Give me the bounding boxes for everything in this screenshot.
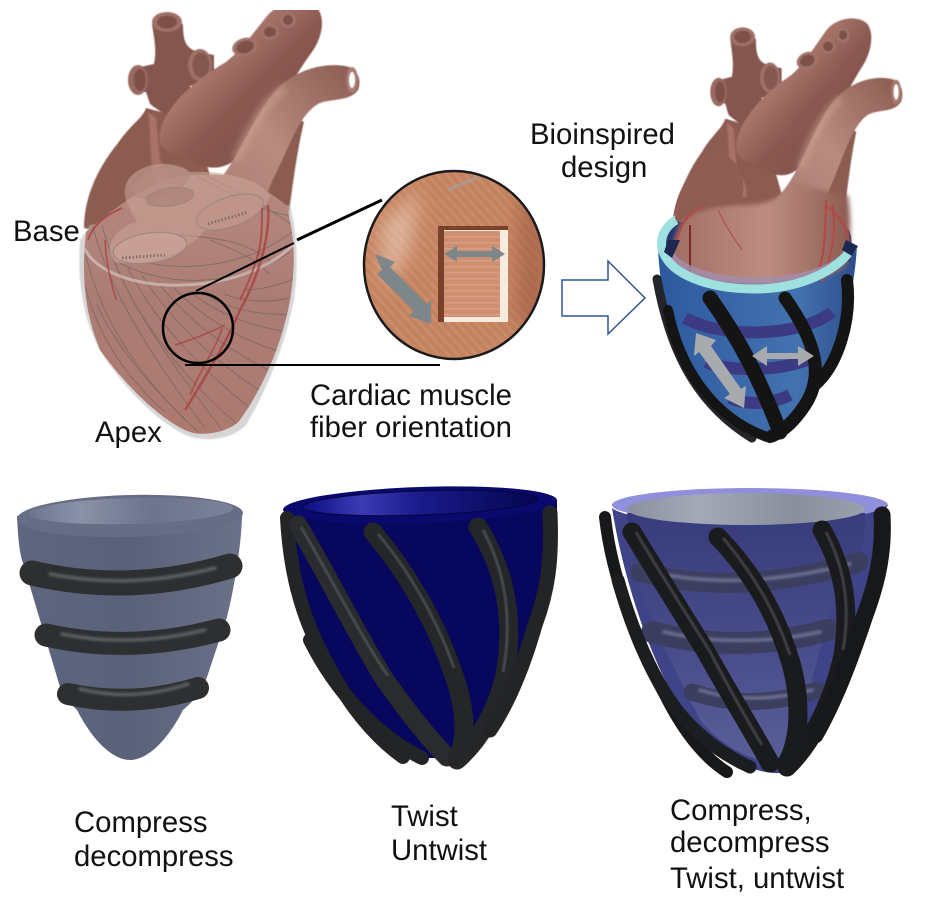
valve plane (110, 159, 270, 268)
cup opening (302, 487, 538, 519)
label: twist untwist: Twist (391, 800, 458, 833)
heart upper vessels (674, 18, 902, 254)
rim dark ends (664, 240, 858, 258)
black twist tubes (657, 279, 848, 438)
coronary arteries (676, 200, 848, 282)
label: twist untwist: Untwist (391, 834, 487, 867)
panel: compress actuator (16, 492, 244, 760)
muscle tissue texture (364, 171, 544, 359)
arrow: outline to design (562, 261, 645, 334)
band 1 (32, 566, 230, 583)
twist tubes (287, 513, 550, 760)
tube highlights (636, 532, 846, 745)
zoom connector lines (185, 200, 440, 365)
small grey mark (448, 177, 478, 190)
label: combined motion: Compress, (670, 794, 812, 827)
heart upper vessels (83, 10, 360, 230)
coronary arteries (88, 205, 268, 410)
arrow: diagonal sleeve direction (694, 333, 746, 408)
ventricle with fibers (80, 172, 296, 434)
cyan rim (662, 220, 853, 289)
label: combined motion: Twist, untwist (670, 862, 844, 895)
arrow: diagonal fiber direction (375, 254, 431, 324)
muscle fiber lines (80, 172, 296, 432)
sleeve body (658, 246, 857, 432)
pale band line (84, 245, 293, 285)
tissue dark side (510, 200, 543, 328)
zoom circle on heart (163, 293, 233, 363)
lavender rim (612, 488, 888, 522)
label: combined motion: decompress (670, 826, 830, 859)
circle outline (364, 171, 544, 359)
cone inner (29, 495, 233, 527)
translucent outer shell (79, 205, 297, 439)
panel: magnified cardiac muscle (364, 171, 550, 359)
label: Base: Base (13, 215, 80, 248)
purple compression rings (685, 312, 832, 403)
band 2 (46, 630, 219, 643)
label: bioinspired design: design (561, 151, 647, 184)
label: cardiac muscle fiber orientation: Cardiac muscle (310, 379, 512, 412)
panel: heart with muscle fiber layer (79, 2, 359, 439)
cup rim (282, 482, 558, 528)
arrow: horizontal sleeve direction (752, 346, 814, 366)
compress rings (640, 562, 858, 702)
tube highlights (301, 527, 507, 676)
cup body (283, 500, 557, 758)
panel: combined actuator (605, 488, 888, 773)
cone opening (16, 492, 244, 540)
cone body (17, 513, 242, 760)
label: compress decompress: Compress (74, 806, 208, 839)
panel: bioinspired heart with sleeve (657, 18, 902, 438)
panel: twist actuator (282, 482, 558, 760)
heart lower body (666, 182, 850, 284)
tissue shading (380, 190, 420, 290)
inner translucent band (670, 245, 850, 284)
cut out window (438, 226, 508, 322)
atrium overhang (673, 150, 743, 218)
label: Apex: Apex (95, 416, 162, 449)
sleeve inner back (664, 222, 851, 262)
twist tubes (605, 515, 882, 772)
outer translucent cup (612, 505, 887, 773)
arrow: horizontal fiber direction (444, 246, 505, 262)
label: compress decompress: decompress (74, 840, 234, 873)
inner opening (627, 493, 865, 525)
band 3 (68, 684, 198, 700)
label: bioinspired design: Bioinspired (530, 118, 675, 151)
label: cardiac muscle fiber orientation: fiber orientation (310, 411, 512, 444)
inner cone (627, 513, 865, 761)
